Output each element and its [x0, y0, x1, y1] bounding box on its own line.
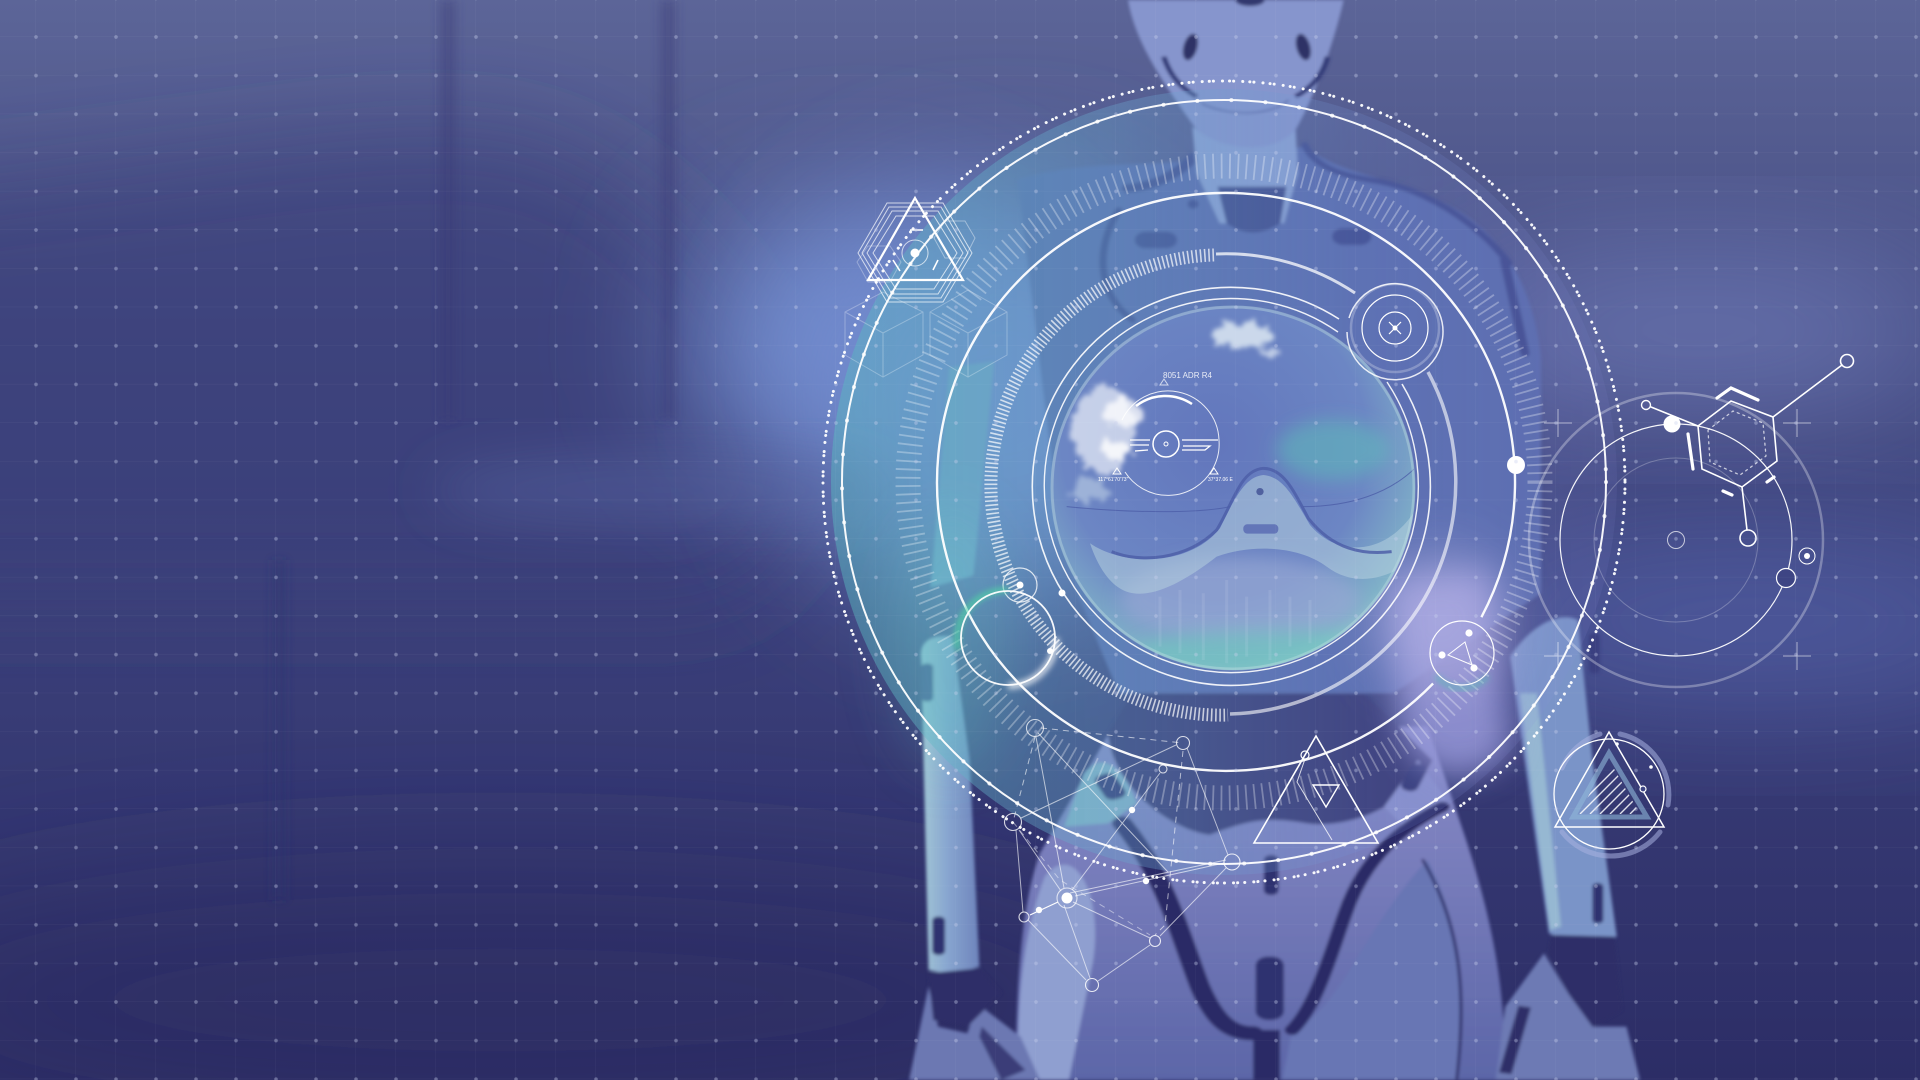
robot: head — [1128, 0, 1344, 147]
robot: left hip panel — [1018, 865, 1095, 1080]
robot: neck — [1192, 127, 1298, 223]
robot: right waist guard — [1384, 760, 1447, 827]
robot: chest plate — [1018, 147, 1541, 693]
icon: green orbit circle — [957, 590, 1056, 686]
robot: lavender flank glow — [1390, 570, 1510, 775]
robot: neck core — [1217, 187, 1286, 232]
robot: centre seam — [1253, 1030, 1280, 1080]
robot: left forearm — [921, 636, 979, 973]
robot visor reflection — [1067, 467, 1417, 594]
icon: left small dial — [1003, 568, 1066, 602]
earth HUD readout — [1098, 371, 1233, 495]
icon: target reticle — [1347, 284, 1443, 380]
bright ring node — [1507, 456, 1525, 474]
earth globe — [1051, 306, 1417, 677]
earth HUD label: satellite code: 8051 ADR R4 — [1163, 371, 1212, 380]
robot: left hand — [909, 968, 1040, 1080]
icon: molecule — [1642, 354, 1854, 546]
concentric HUD rings — [823, 81, 1625, 883]
HUD glow disc — [831, 89, 1617, 875]
earth HUD label: west coordinate: 117°61'70'73" — [1098, 477, 1129, 483]
cloud masses — [1070, 322, 1277, 503]
icon: constellation network — [1004, 720, 1240, 992]
icon: hexagon triangle emblem — [857, 198, 975, 302]
lower globe periwinkle haze — [1120, 557, 1360, 643]
robot: upper arms — [931, 324, 1522, 627]
robot: shoulder creases — [1103, 145, 1525, 353]
robot: right hand — [1496, 935, 1640, 1080]
robot: lower limbs and pelvis — [909, 617, 1640, 1080]
robot: right thigh panel — [1282, 860, 1462, 1080]
robot: head and chest — [1018, 0, 1541, 693]
robot: lower torso — [1016, 727, 1505, 1080]
teal reflection — [1277, 420, 1390, 480]
earth HUD label: east coordinate: 37°37.06 E — [1208, 477, 1233, 483]
robot: abdominal slots — [1092, 762, 1429, 1020]
molecule orbit rings — [1529, 393, 1823, 687]
icon: faint cubes — [845, 290, 1007, 377]
icon: triangle nodes — [1430, 621, 1494, 688]
robot figure — [909, 0, 1640, 1080]
robot: dark waist band — [1108, 693, 1433, 835]
robot: right forearm — [1510, 617, 1617, 941]
icon: triangle glyph — [1254, 736, 1378, 843]
robot: left waist guard — [1064, 763, 1137, 827]
robot: dark pelvic harness — [1122, 807, 1461, 1080]
robot: chest slots — [1135, 199, 1371, 248]
vertical streaks — [1160, 580, 1310, 663]
icon: hatched triangle emblem — [1554, 732, 1680, 856]
lower globe teal band — [1147, 628, 1338, 668]
